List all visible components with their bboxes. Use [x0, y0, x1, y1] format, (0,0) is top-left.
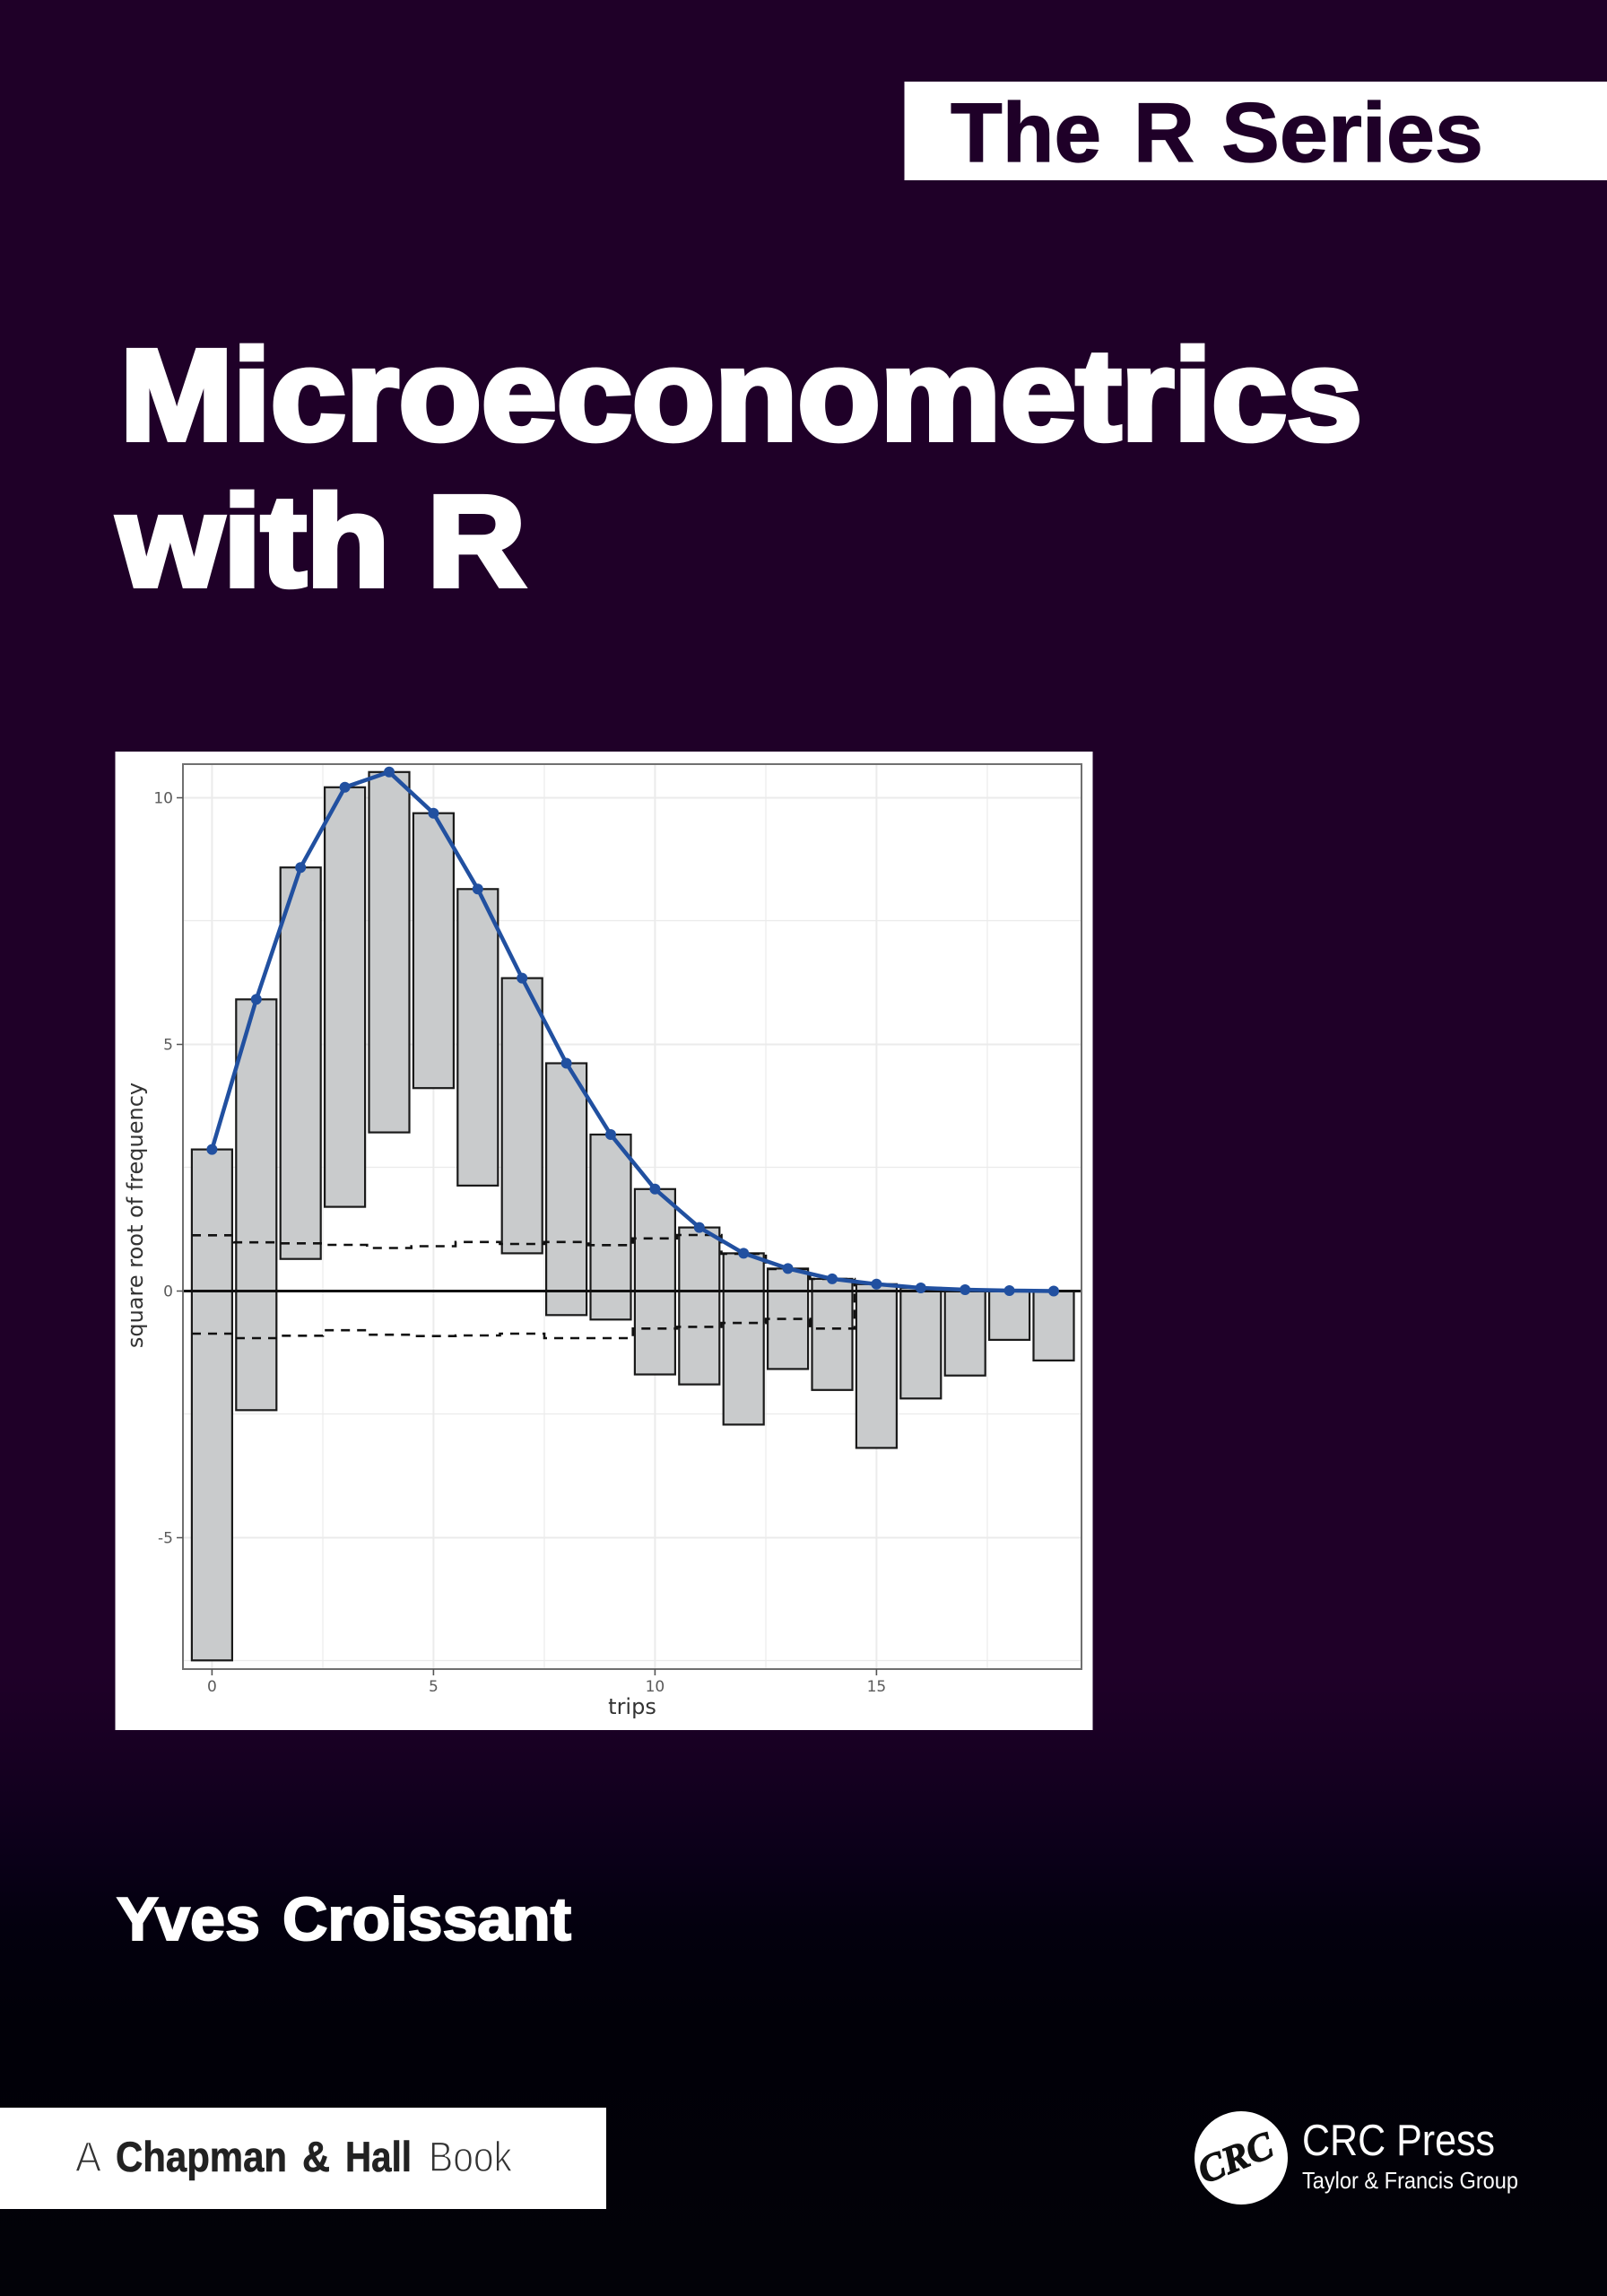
series name: Series: [1221, 85, 1483, 179]
title: with R: [117, 469, 526, 613]
y axis ticks and labels: [153, 789, 183, 1548]
imprint text: A: [75, 2133, 102, 2180]
y axis ticks and labels: -5: [158, 1530, 173, 1548]
zero line: [183, 1290, 1081, 1292]
series name: R: [1134, 85, 1194, 179]
panel: rootogram chart: [115, 752, 1092, 1730]
y axis title: square root of frequency: [123, 1083, 148, 1348]
title: Microeconometrics: [120, 323, 1362, 467]
imprint text: Hall: [345, 2133, 412, 2180]
imprint text: Book: [429, 2133, 512, 2180]
x axis ticks and labels: [207, 1669, 886, 1696]
logo circle: CRC: [1192, 2124, 1281, 2192]
x axis ticks and labels: 5: [429, 1678, 439, 1696]
imprint text: &: [302, 2133, 330, 2180]
publisher name: CRC Press: [1302, 2117, 1495, 2165]
series name: [951, 85, 1483, 179]
author: [117, 1885, 571, 1953]
imprint text: [75, 2133, 512, 2180]
series banner: [904, 82, 1607, 180]
publisher group: Taylor & Francis Group: [1302, 2167, 1518, 2194]
x axis ticks and labels: 10: [646, 1678, 665, 1696]
bars: [192, 772, 1073, 1660]
y axis ticks and labels: 10: [153, 789, 173, 807]
plot grid: [183, 764, 1081, 1669]
series name: The: [951, 85, 1101, 179]
imprint text: Chapman: [116, 2133, 287, 2180]
x axis ticks and labels: 15: [867, 1678, 886, 1696]
author: Croissant: [282, 1885, 571, 1953]
x axis title: trips: [608, 1694, 656, 1719]
publisher logo: [1192, 2111, 1518, 2205]
upper and lower confidence bounds: [192, 1235, 855, 1338]
author: Yves: [117, 1885, 260, 1953]
title: [117, 323, 1362, 613]
y axis ticks and labels: 0: [163, 1283, 173, 1300]
x axis ticks and labels: 0: [207, 1678, 217, 1696]
fitted frequency line: [206, 767, 1059, 1297]
y axis ticks and labels: 5: [163, 1037, 173, 1055]
imprint banner: [0, 2108, 606, 2209]
plot border: [183, 764, 1081, 1669]
logo circle: [1192, 2111, 1288, 2205]
